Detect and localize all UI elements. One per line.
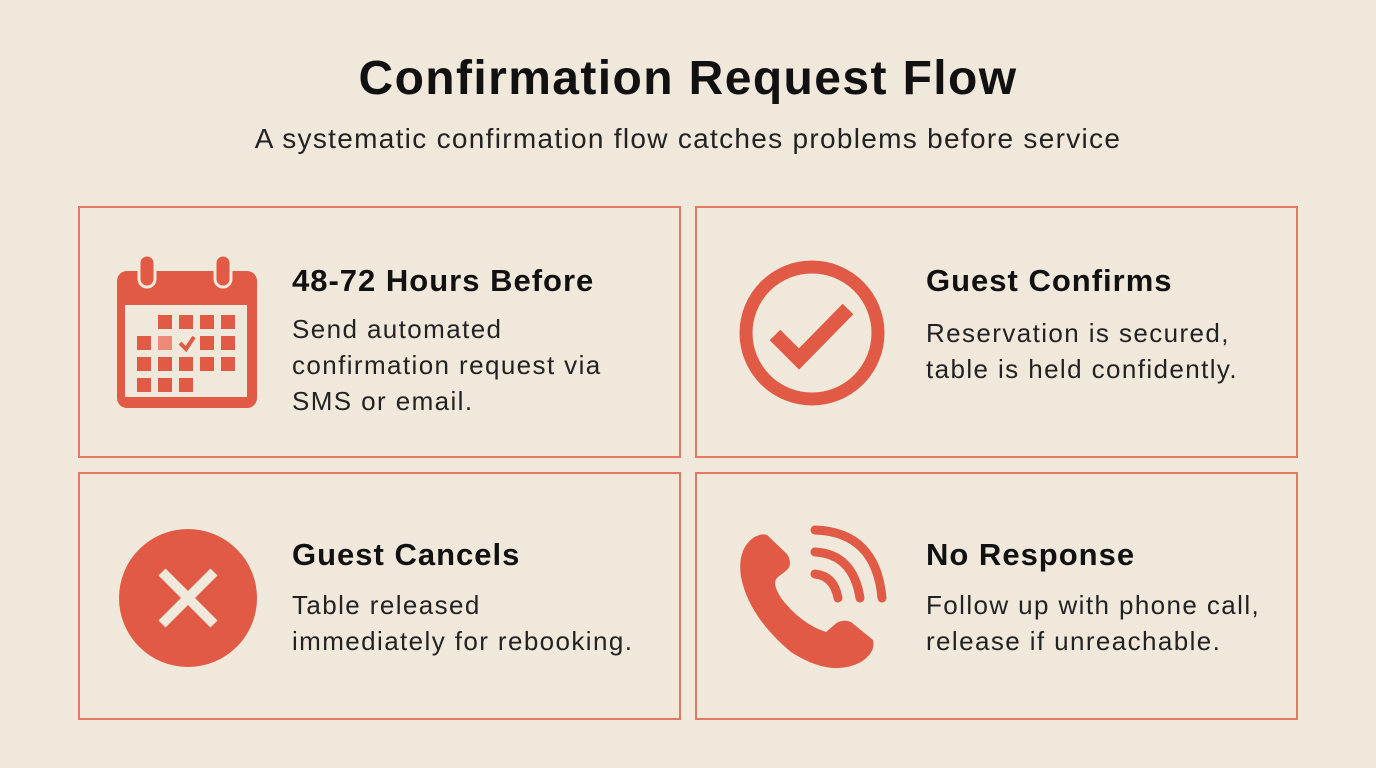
text: Reservation is secured, xyxy=(926,318,1230,348)
text xyxy=(292,590,633,656)
panel: no response xyxy=(695,472,1298,720)
panel: guest cancels xyxy=(78,472,681,720)
heading: Guest Confirms xyxy=(926,263,1173,298)
heading: 48-72 Hours Before xyxy=(292,263,594,298)
text: confirmation request via xyxy=(292,350,602,380)
heading: No Response xyxy=(926,537,1135,572)
icon: x circle xyxy=(119,529,257,667)
icon: calendar xyxy=(117,256,257,408)
text: release if unreachable. xyxy=(926,626,1221,656)
panel: guest confirms xyxy=(695,206,1298,458)
text: Table released xyxy=(292,590,481,620)
subtitle: A systematic confirmation flow catches problems before service xyxy=(255,123,1121,154)
text xyxy=(292,314,602,416)
text: Follow up with phone call, xyxy=(926,590,1260,620)
icon: phone xyxy=(740,526,886,668)
title: Confirmation Request Flow xyxy=(358,52,1018,105)
text: SMS or email. xyxy=(292,386,473,416)
panel: 48-72 hours before xyxy=(78,206,681,458)
icon: check circle xyxy=(740,260,884,406)
text xyxy=(926,318,1238,384)
text: immediately for rebooking. xyxy=(292,626,633,656)
heading: Guest Cancels xyxy=(292,537,520,572)
text: Send automated xyxy=(292,314,502,344)
text xyxy=(926,590,1260,656)
text: table is held confidently. xyxy=(926,354,1238,384)
